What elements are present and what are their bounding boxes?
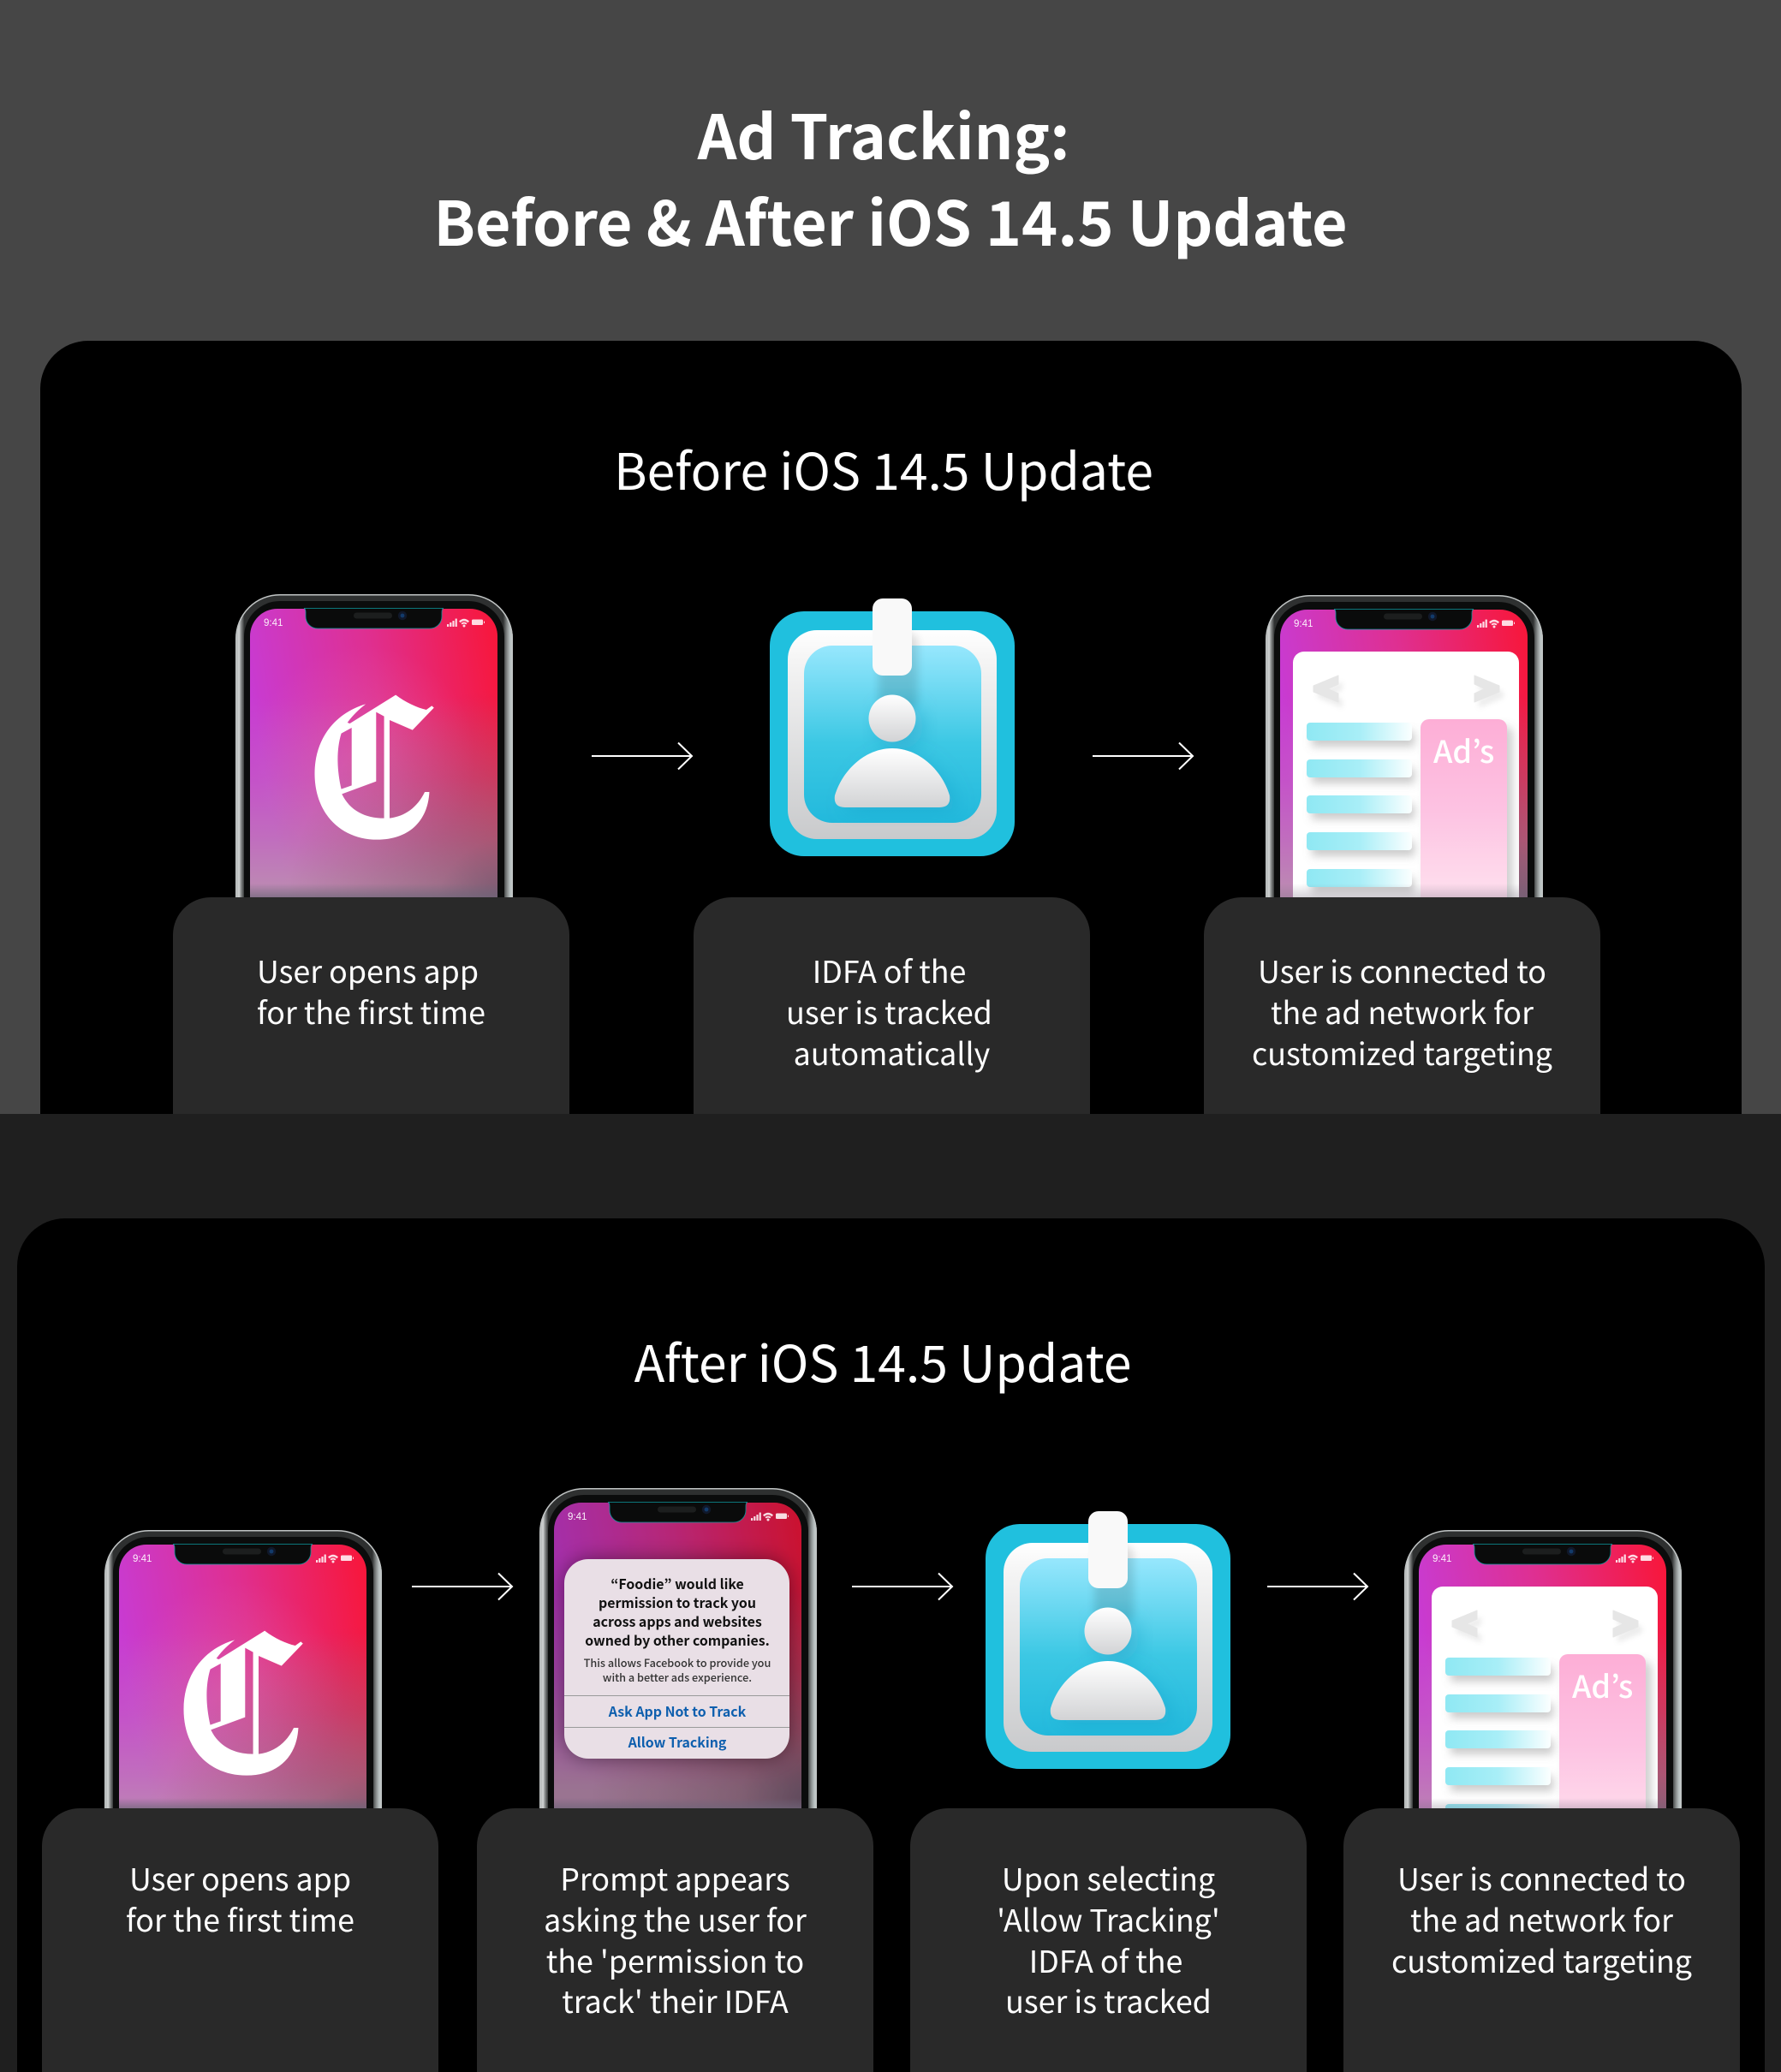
arrow — [852, 1572, 954, 1601]
card: step 3 — [1204, 897, 1600, 1114]
card: step 3: the ad network for — [1271, 989, 1534, 1033]
card: step 2: Prompt appears — [560, 1855, 790, 1900]
dialog: permission alert: owned by other companies. — [585, 1630, 770, 1650]
card: step 3: IDFA of the — [1029, 1938, 1182, 1982]
icon: IDFA badge — [770, 598, 1015, 856]
arrow — [1093, 741, 1194, 771]
card: step 2: track' their IDFA — [562, 1978, 789, 2022]
phone: ad network page: Ad’s — [1572, 1663, 1633, 1707]
card: step 4: customized targeting — [1391, 1938, 1692, 1982]
card: step 4: User is connected to — [1397, 1855, 1686, 1900]
card: step 1: for the first time — [126, 1896, 354, 1941]
card: step 1 — [173, 897, 569, 1114]
dialog: permission alert: This allows Facebook to provide you — [584, 1654, 771, 1670]
phone: app opened: 9:41 — [133, 1554, 152, 1564]
title: Ad Tracking: — [698, 88, 1069, 177]
phone: ad network page — [1404, 1530, 1682, 1808]
dialog: permission alert: with a better ads experience. — [603, 1669, 752, 1685]
card: step 3: 'Allow Tracking' — [997, 1896, 1220, 1941]
heading: before: Before iOS 14.5 Update — [614, 432, 1153, 504]
card: step 2: the 'permission to — [546, 1938, 804, 1982]
card: step 2: user is tracked — [786, 989, 992, 1033]
phone: tracking permission prompt: 9:41 — [568, 1512, 587, 1522]
panel: before iOS 14.5 update — [40, 341, 1742, 1114]
phone: app opened — [235, 594, 513, 897]
top background — [0, 0, 1781, 1114]
arrow — [412, 1572, 514, 1601]
title: Before & After iOS 14.5 Update — [433, 175, 1348, 264]
icon: IDFA badge — [986, 1511, 1230, 1769]
arrow — [592, 741, 694, 771]
card: step 3: Upon selecting — [1002, 1855, 1215, 1900]
card: step 1: User opens app — [129, 1855, 351, 1900]
dialog: permission alert — [564, 1559, 789, 1759]
card: step 1 — [42, 1808, 438, 2072]
phone: tracking permission prompt — [539, 1488, 817, 1808]
phone: app opened: 9:41 — [264, 618, 283, 628]
arrow — [1267, 1572, 1368, 1601]
dialog: permission alert: across apps and websites — [593, 1611, 762, 1631]
dialog: permission alert: Ask App Not to Track — [608, 1701, 747, 1721]
card: step 3: User is connected to — [1258, 948, 1546, 992]
card: step 2: automatically — [794, 1030, 990, 1075]
card: step 1: for the first time — [257, 989, 485, 1033]
phone: app opened — [104, 1530, 382, 1808]
heading: after: After iOS 14.5 Update — [634, 1324, 1131, 1396]
dialog: permission alert: Allow Tracking — [628, 1732, 727, 1752]
card: step 4 — [1343, 1808, 1740, 2072]
card: step 3: customized targeting — [1252, 1030, 1552, 1075]
card: step 4: the ad network for — [1410, 1896, 1673, 1941]
card: step 3: user is tracked — [1005, 1978, 1212, 2022]
card: step 2: IDFA of the — [813, 948, 966, 992]
card: step 1: User opens app — [257, 948, 479, 992]
phone: ad network page: Ad’s — [1433, 728, 1494, 772]
panel: after iOS 14.5 update — [17, 1218, 1765, 2072]
card: step 2: asking the user for — [544, 1896, 807, 1941]
dialog: permission alert: “Foodie” would like — [611, 1574, 744, 1593]
phone: ad network page: 9:41 — [1294, 619, 1313, 629]
phone: ad network page — [1266, 595, 1543, 897]
card: step 2 — [694, 897, 1090, 1114]
title — [433, 88, 1348, 264]
phone: ad network page: 9:41 — [1433, 1554, 1451, 1564]
dialog: permission alert: permission to track you — [599, 1593, 756, 1612]
card: step 3 — [910, 1808, 1307, 2072]
card: step 2 — [477, 1808, 873, 2072]
